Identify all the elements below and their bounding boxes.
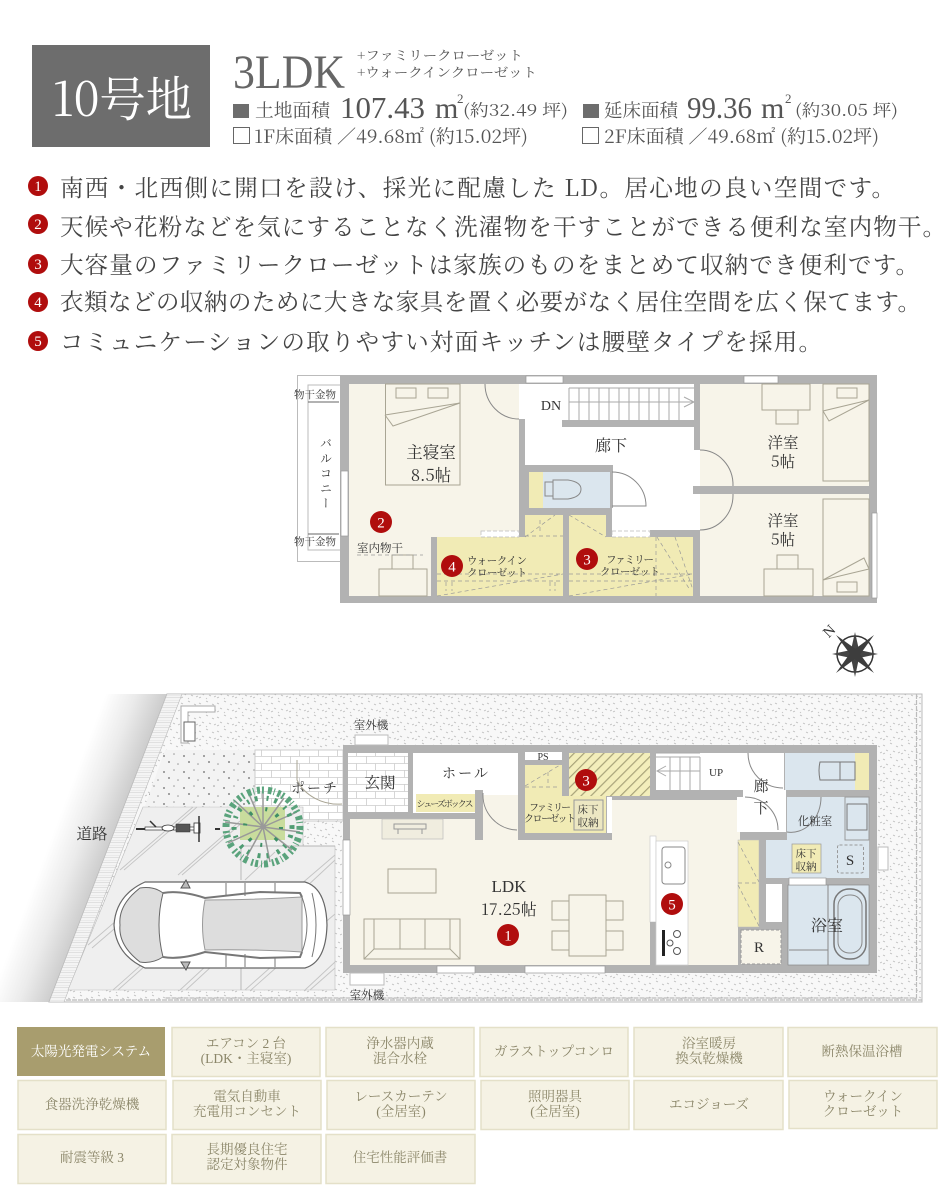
markers 1 3 5: 3 — [582, 774, 590, 790]
wash room: S — [846, 853, 854, 869]
water faucet — [326, 1028, 474, 1076]
balcony: 物干金物 — [294, 387, 336, 402]
performance report: 住宅性能評価書 — [353, 1149, 447, 1165]
EV outlet: 電気自動車 — [213, 1088, 281, 1104]
feature 2: 天候や花粉などを気にすることなく洗濯物を干すことができる便利な室内物干。 — [60, 208, 946, 242]
1F stairs and corridor — [656, 753, 786, 832]
western room upper — [700, 376, 869, 486]
wash room — [766, 797, 869, 878]
walk-in closet: ウォークイン — [823, 1089, 903, 1104]
walk-in closet — [789, 1080, 937, 1128]
outdoor units — [350, 717, 389, 1003]
1F toilet — [785, 753, 869, 790]
total floor area: m — [761, 92, 784, 125]
performance report — [326, 1134, 475, 1184]
eco jaws: エコジョーズ — [669, 1097, 749, 1112]
1F family closet: 収納 — [578, 815, 599, 830]
PS: PS — [537, 752, 549, 763]
1F family closet: 床下 — [578, 802, 599, 817]
1F family closet: ファミリー — [529, 799, 571, 814]
seismic grade: 耐震等級 3 — [60, 1150, 124, 1165]
1F stairs and corridor: 下 — [753, 797, 769, 818]
site plan: 1F — [0, 694, 922, 1003]
header: lot number badge: 10号地 — [52, 61, 192, 130]
land area: 土地面積 — [255, 97, 332, 123]
markers 2 3 4: 4 — [448, 560, 456, 576]
air conditioner: エアコン 2 台 — [206, 1036, 287, 1051]
feature 1: 南西・北西側に開口を設け、採光に配慮した LD。居心地の良い空間です。 — [60, 169, 895, 203]
floor plan: 2F — [294, 375, 877, 603]
master bedroom: 8.5帖 — [411, 462, 451, 486]
R box — [741, 930, 781, 964]
outdoor units: 室外機 — [354, 717, 389, 733]
feature 4: 衣類などの収納のために大きな家具を置く必要がなく居住空間を広く保てます。 — [60, 283, 921, 317]
LDK room — [350, 795, 740, 965]
extra storage notes — [357, 45, 537, 81]
hall: ホール — [442, 763, 488, 783]
walk-in closet: クローゼット — [823, 1104, 903, 1119]
glass top stove: ガラストップコンロ — [494, 1044, 614, 1059]
outer walls — [340, 375, 877, 603]
markers 2 3 4: 3 — [583, 552, 591, 568]
niche — [766, 884, 782, 922]
numbered feature list — [28, 169, 946, 357]
feature 5: コミュニケーションの取りやすい対面キッチンは腰壁タイプを採用。 — [60, 323, 822, 357]
water faucet: 浄水器内蔵 — [366, 1035, 434, 1051]
markers 1 3 5 — [497, 769, 683, 946]
family closet: ファミリー — [606, 552, 654, 567]
walk-in closet — [437, 515, 563, 596]
land area: 2 — [457, 91, 464, 106]
wash room: 床下 — [796, 846, 817, 861]
feature 3: 3 — [34, 257, 42, 273]
walk-in closet: クローゼット — [467, 565, 527, 580]
driveway — [68, 807, 335, 990]
markers 2 3 4: 2 — [377, 516, 385, 532]
hall and stairs — [519, 376, 700, 537]
total floor area: (約30.05 坪) — [795, 97, 898, 121]
partition wall stub — [693, 486, 700, 494]
western room upper: 5帖 — [771, 450, 795, 472]
porch door arc — [297, 760, 342, 804]
hall and stairs: 廊下 — [595, 433, 627, 456]
compass — [820, 622, 878, 677]
land area: 107.43 — [340, 90, 425, 125]
western room lower — [700, 494, 877, 598]
header: layout type and area specs — [233, 45, 898, 149]
wash room: 化粧室 — [798, 813, 833, 829]
feature 5: 5 — [34, 334, 42, 350]
shoe box: シューズボックス — [416, 797, 474, 810]
solar power (highlighted): 太陽光発電システム — [31, 1043, 151, 1059]
long-life housing — [172, 1134, 321, 1184]
water faucet: 混合水栓 — [373, 1050, 427, 1066]
1F family closet: クローゼット — [524, 810, 576, 825]
entrance: 玄関 — [364, 771, 396, 793]
compass: N — [820, 622, 839, 641]
1F family closet — [524, 765, 612, 833]
lighting: 照明器具 — [528, 1089, 582, 1104]
hall — [413, 753, 518, 813]
1F stairs and corridor: 廊 — [753, 775, 769, 796]
outdoor meter box — [181, 706, 215, 743]
long-life housing: 長期優良住宅 — [206, 1141, 288, 1157]
bathroom: 浴室 — [811, 913, 843, 936]
2F floor area: 2F床面積 ／49.68㎡ (約15.02坪) — [604, 123, 879, 149]
markers 1 3 5: 5 — [668, 898, 676, 914]
lighting — [481, 1080, 629, 1130]
land area: m — [435, 92, 458, 125]
porch label: ポーチ — [291, 778, 337, 798]
dishwasher: 食器洗浄乾燥機 — [45, 1096, 140, 1112]
total floor area — [583, 90, 898, 125]
LDK room: 17.25帖 — [481, 897, 537, 920]
extra storage notes: +ファミリークローゼット — [357, 45, 523, 64]
hall and stairs: DN — [541, 399, 561, 414]
family closet — [569, 515, 693, 596]
1F stairs and corridor: UP — [709, 767, 723, 779]
bicycle — [136, 816, 220, 842]
wall protrusion at east side — [878, 847, 888, 870]
PS — [525, 752, 562, 763]
family closet: クローゼット — [600, 564, 660, 579]
lace curtains: (全居室) — [376, 1103, 426, 1119]
land area: (約32.49 坪) — [463, 97, 568, 121]
extra storage notes: +ウォークインクローゼット — [357, 62, 537, 81]
EV outlet: 充電用コンセント — [193, 1103, 301, 1119]
lot ground — [49, 694, 922, 1002]
western room lower: 洋室 — [767, 509, 799, 531]
balcony: バルコニー — [318, 437, 334, 512]
solar power (highlighted) — [17, 1027, 165, 1076]
balcony window — [341, 471, 348, 536]
hatched closet area — [569, 753, 650, 796]
master bedroom — [349, 384, 519, 596]
entrance — [348, 753, 408, 812]
insulated bath — [788, 1028, 937, 1076]
eco jaws — [634, 1080, 783, 1130]
western room lower: 5帖 — [771, 528, 795, 550]
total floor area: 99.36 — [687, 90, 752, 125]
land area — [233, 90, 568, 125]
balcony — [294, 376, 341, 562]
seismic grade — [18, 1134, 166, 1184]
EV outlet — [173, 1080, 321, 1130]
bathroom — [788, 878, 869, 965]
balcony: 物干金物 — [294, 534, 336, 549]
feature 2: 2 — [34, 217, 42, 233]
wash room: 収納 — [796, 859, 817, 874]
equipment grid — [17, 1027, 937, 1184]
1F floor area: 1F床面積 ／49.68㎡ (約15.02坪) — [254, 123, 528, 149]
master bedroom: 主寝室 — [406, 439, 456, 463]
air conditioner: (LDK・主寝室) — [201, 1050, 291, 1066]
markers 1 3 5: 1 — [504, 928, 512, 944]
1F outer walls — [343, 745, 877, 973]
lace curtains — [327, 1080, 475, 1130]
walk-in closet: ウォークイン — [467, 553, 527, 568]
porch tiles — [255, 750, 343, 821]
long-life housing: 認定対象物件 — [206, 1156, 288, 1172]
car — [114, 880, 327, 970]
LDK room: LDK — [492, 877, 527, 896]
tree — [225, 790, 300, 864]
bathroom heater — [634, 1028, 783, 1076]
total floor area: 2 — [785, 91, 792, 106]
outdoor units: 室外機 — [350, 987, 385, 1003]
sidewalk strip — [49, 694, 182, 1002]
layout type 3LDK: 3LDK — [233, 46, 345, 99]
windows south — [343, 840, 605, 973]
lace curtains: レースカーテン — [354, 1089, 448, 1104]
storage along LDK — [738, 840, 759, 927]
glass top stove — [480, 1028, 628, 1076]
road shading and label — [0, 694, 167, 1002]
toilet — [529, 472, 646, 508]
lighting: (全居室) — [530, 1103, 580, 1119]
insulated bath: 断熱保温浴槽 — [822, 1043, 903, 1059]
shoe box — [416, 794, 475, 812]
western room upper: 洋室 — [767, 431, 799, 453]
air conditioner — [172, 1028, 320, 1076]
markers 2 3 4 — [370, 511, 598, 577]
feature 1: 1 — [34, 179, 42, 195]
dishwasher — [18, 1080, 166, 1130]
pebble bed — [145, 750, 255, 806]
feature 3: 大容量のファミリークローゼットは家族のものをまとめて収納でき便利です。 — [60, 246, 919, 280]
header: lot number badge — [32, 45, 210, 147]
road shading and label: 道路 — [76, 822, 108, 844]
bathroom heater: 換気乾燥機 — [675, 1050, 743, 1066]
kitchen — [650, 836, 688, 965]
feature 4: 4 — [34, 295, 42, 311]
total floor area: 延床面積 — [604, 97, 679, 123]
boundary lines — [66, 694, 922, 1000]
R box: R — [754, 940, 764, 956]
bathroom heater: 浴室暖房 — [682, 1035, 736, 1051]
master bedroom: 室内物干 — [357, 540, 403, 556]
LDK door wall and arc — [475, 790, 517, 840]
